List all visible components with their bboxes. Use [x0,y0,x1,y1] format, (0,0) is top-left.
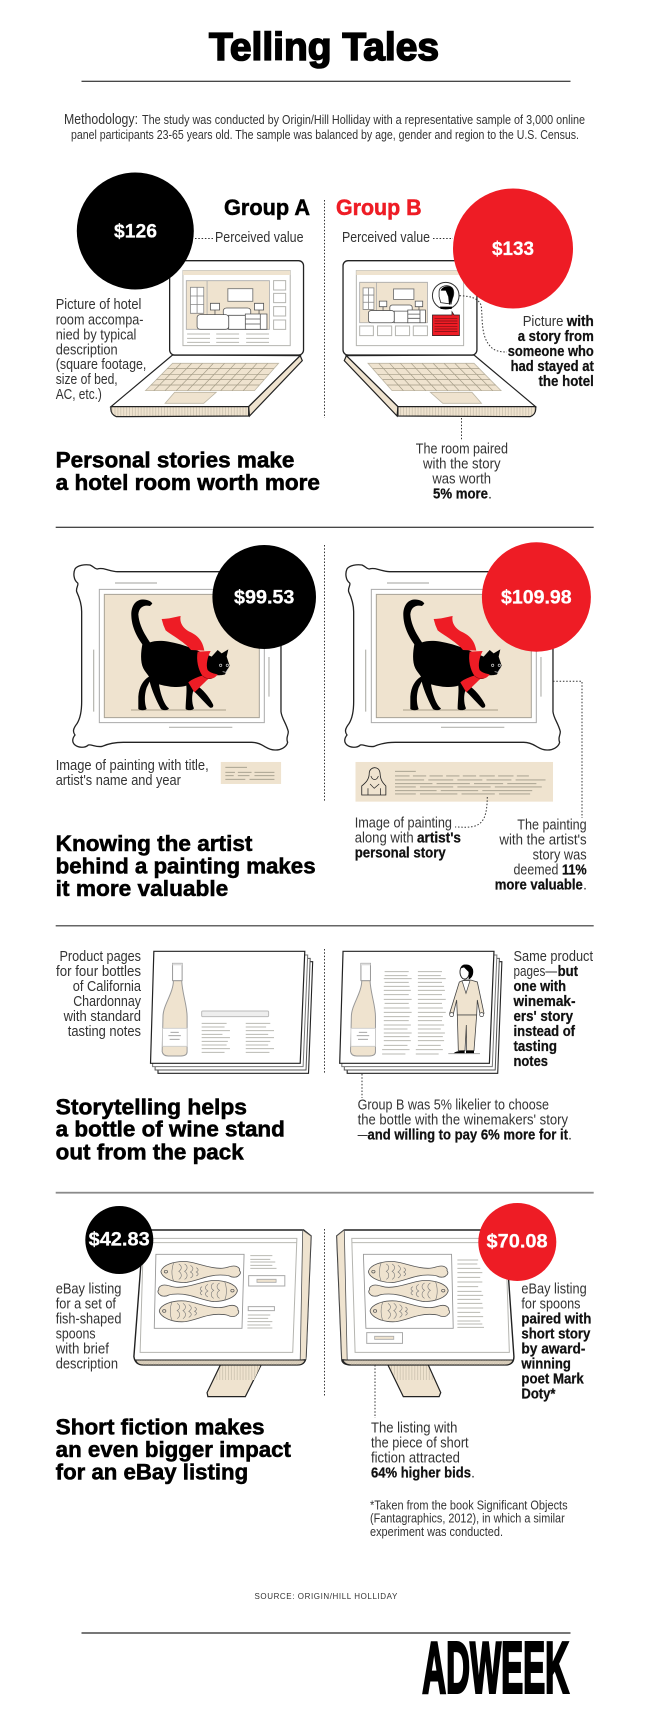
heading: short fiction: for an eBay listing [56,1459,248,1484]
result: 5% likelier, 6% more: Group B was 5% likelier to choose [358,1097,549,1113]
perceived value label A: Perceived value [215,230,304,246]
group A caption: AC, etc.) [56,387,102,403]
group A caption [56,949,142,1040]
group A caption: eBay listing [56,1282,121,1298]
artist story card [356,762,553,802]
dotted leader: story card to caption [455,797,487,827]
group B caption: poet Mark [521,1372,585,1388]
group B caption: by award- [521,1342,586,1358]
group B caption [513,949,593,1070]
value circle: group B: $133 [492,238,534,260]
group A heading: Group A [224,195,310,220]
result: 64% higher bids: the piece of short [371,1435,469,1451]
result: 11% more valuable: more valuable [495,877,583,893]
group A caption: fish-shaped [56,1312,121,1328]
monitor: group B [337,1230,514,1397]
group A caption: of California [73,979,142,995]
result: 5% more: with the story [422,456,501,472]
group A caption: (square footage, [56,357,146,373]
group B caption: eBay listing [521,1282,587,1298]
result: 5% likelier, 6% more: the bottle with the winemakers' story [358,1112,569,1128]
monitor: group A [134,1230,311,1397]
value circle: group B [453,188,573,308]
methodology text [64,112,585,142]
heading: short fiction: an even bigger impact [56,1437,292,1462]
result: 5% likelier, 6% more [358,1074,572,1143]
heading: storytelling: out from the pack [56,1139,244,1164]
heading: personal stories: a hotel room worth more [56,470,320,495]
heading: knowing the artist: Knowing the artist [56,831,253,856]
group B heading: Group B [336,195,422,220]
group A caption: tasting notes [68,1024,141,1040]
result: 5% likelier, 6% more: and willing to pay 6% more for it [368,1127,568,1143]
title: Telling Tales [209,26,439,69]
result: 64% higher bids: fiction attracted [371,1450,460,1466]
group B caption: Picture [523,314,563,330]
group B caption: Same product [514,949,593,965]
group A caption: description [56,342,118,358]
group A caption: Product pages [60,949,141,965]
group A caption: Chardonnay [73,994,142,1010]
result: 11% more valuable: 11% [562,862,587,878]
group B caption: paired with [521,1312,591,1328]
group B caption: the hotel [538,374,594,390]
group B caption: a story from [518,329,594,345]
group B caption: personal story [355,845,446,861]
result: 5% more [416,418,508,502]
panel: wine [56,949,593,1164]
painting: group A [73,565,288,750]
result: 5% more: The room paired [416,441,508,457]
product pages: group A [151,951,313,1073]
heading: short fiction [56,1414,292,1484]
dotted leader: story to caption [460,296,507,352]
group A caption [56,297,146,403]
value circle: group A [212,545,316,649]
group A caption [55,1282,121,1373]
group A caption: room accompa- [56,312,144,328]
panel: ebay [55,1203,591,1539]
group A caption: Image of painting with title, [56,758,209,774]
value circle: group A: $126 [114,221,157,243]
result: 11% more valuable: The painting [517,817,587,833]
group B caption: tasting [514,1039,557,1055]
value circle: group A: $42.83 [89,1229,150,1251]
result: 64% higher bids [371,1365,475,1481]
group A caption: for four bottles [56,964,141,980]
result: 11% more valuable: deemed [514,862,558,878]
group A caption [56,758,209,789]
group B caption: artist's [417,830,461,846]
result: 64% higher bids: The listing with [371,1420,457,1436]
group B caption [520,1282,591,1403]
figure: winemaker [448,964,484,1054]
footnote: (Fantagraphics, 2012), in which a similar [370,1512,565,1526]
group A caption: Picture of hotel [56,297,141,313]
result: 64% higher bids: 64% higher bids [371,1465,471,1481]
group B caption: but [558,964,578,980]
panel: hotel room [56,172,594,502]
group B caption: Image of painting [355,815,452,831]
result: 5% likelier, 6% more: — [358,1127,368,1143]
value circle: group B [478,1203,556,1281]
heading: storytelling: Storytelling helps [56,1094,247,1119]
heading: personal stories [56,448,320,495]
group A caption: with brief [55,1342,110,1358]
footnote: *Taken from the book Significant Objects [370,1498,568,1512]
heading: knowing the artist: behind a painting makes [56,853,316,878]
result: 11% more valuable: story was [533,847,587,863]
laptop: group B [343,261,536,417]
group B caption [508,314,594,390]
group A caption: with standard [63,1009,141,1025]
footnote: experiment was conducted. [370,1525,503,1539]
methodology text: Methodology: [64,112,138,128]
group B caption: someone who [508,344,594,360]
result: 5% more: was worth [432,471,491,487]
footnote [370,1498,568,1539]
value circle: group A: $99.53 [234,586,295,608]
title card [221,762,281,784]
group B caption: for spoons [521,1297,580,1313]
group B caption [355,815,461,861]
dotted leader: painting to result [553,681,582,818]
group B caption: pages— [514,964,557,980]
group A caption: spoons [56,1327,96,1343]
group A caption: artist's name and year [56,773,181,789]
heading: storytelling [56,1094,285,1164]
panel: painting [56,542,591,901]
group B caption: short story [521,1327,590,1343]
group B caption: one with [514,979,566,995]
value circle: group B: $70.08 [486,1231,548,1253]
result: 11% more valuable [495,817,587,893]
result: 5% likelier, 6% more: . [568,1127,572,1143]
group B caption: ers' story [514,1009,573,1025]
group B caption: along with [355,830,414,846]
result: 11% more valuable: with the artist's [498,832,587,848]
value circle: group B [482,542,591,652]
group B caption: Doty* [521,1387,556,1403]
perceived value label B: Perceived value [342,230,430,246]
group B caption: instead of [514,1024,575,1040]
group B caption: notes [514,1054,548,1070]
product pages: group B [340,951,502,1073]
painting: group B [345,565,560,750]
value circle: group A [77,172,194,290]
heading: personal stories: Personal stories make [56,448,294,473]
heading: short fiction: Short fiction makes [56,1414,265,1439]
group B caption: winemak- [513,994,576,1010]
result: 5% more: 5% more [433,486,488,502]
group B caption: winning [520,1357,571,1373]
value circle: group B: $109.98 [501,586,572,608]
heading: knowing the artist: it more valuable [56,876,228,901]
result: 5% more: . [488,486,492,502]
group B caption: had stayed at [511,359,594,375]
group A caption: for a set of [56,1297,117,1313]
group B caption: with [566,314,594,330]
result: 64% higher bids: . [471,1465,475,1481]
value circle: group A [85,1206,153,1274]
result: 11% more valuable: . [583,877,587,893]
heading: storytelling: a bottle of wine stand [56,1117,285,1142]
heading: knowing the artist [56,831,316,901]
source: SOURCE: ORIGIN/HILL HOLLIDAY [254,1592,398,1601]
group A caption: nied by typical [56,327,136,343]
title rule [82,81,570,82]
group A caption: description [56,1357,118,1373]
group A caption: size of bed, [56,372,118,388]
laptop: group A [111,261,304,417]
